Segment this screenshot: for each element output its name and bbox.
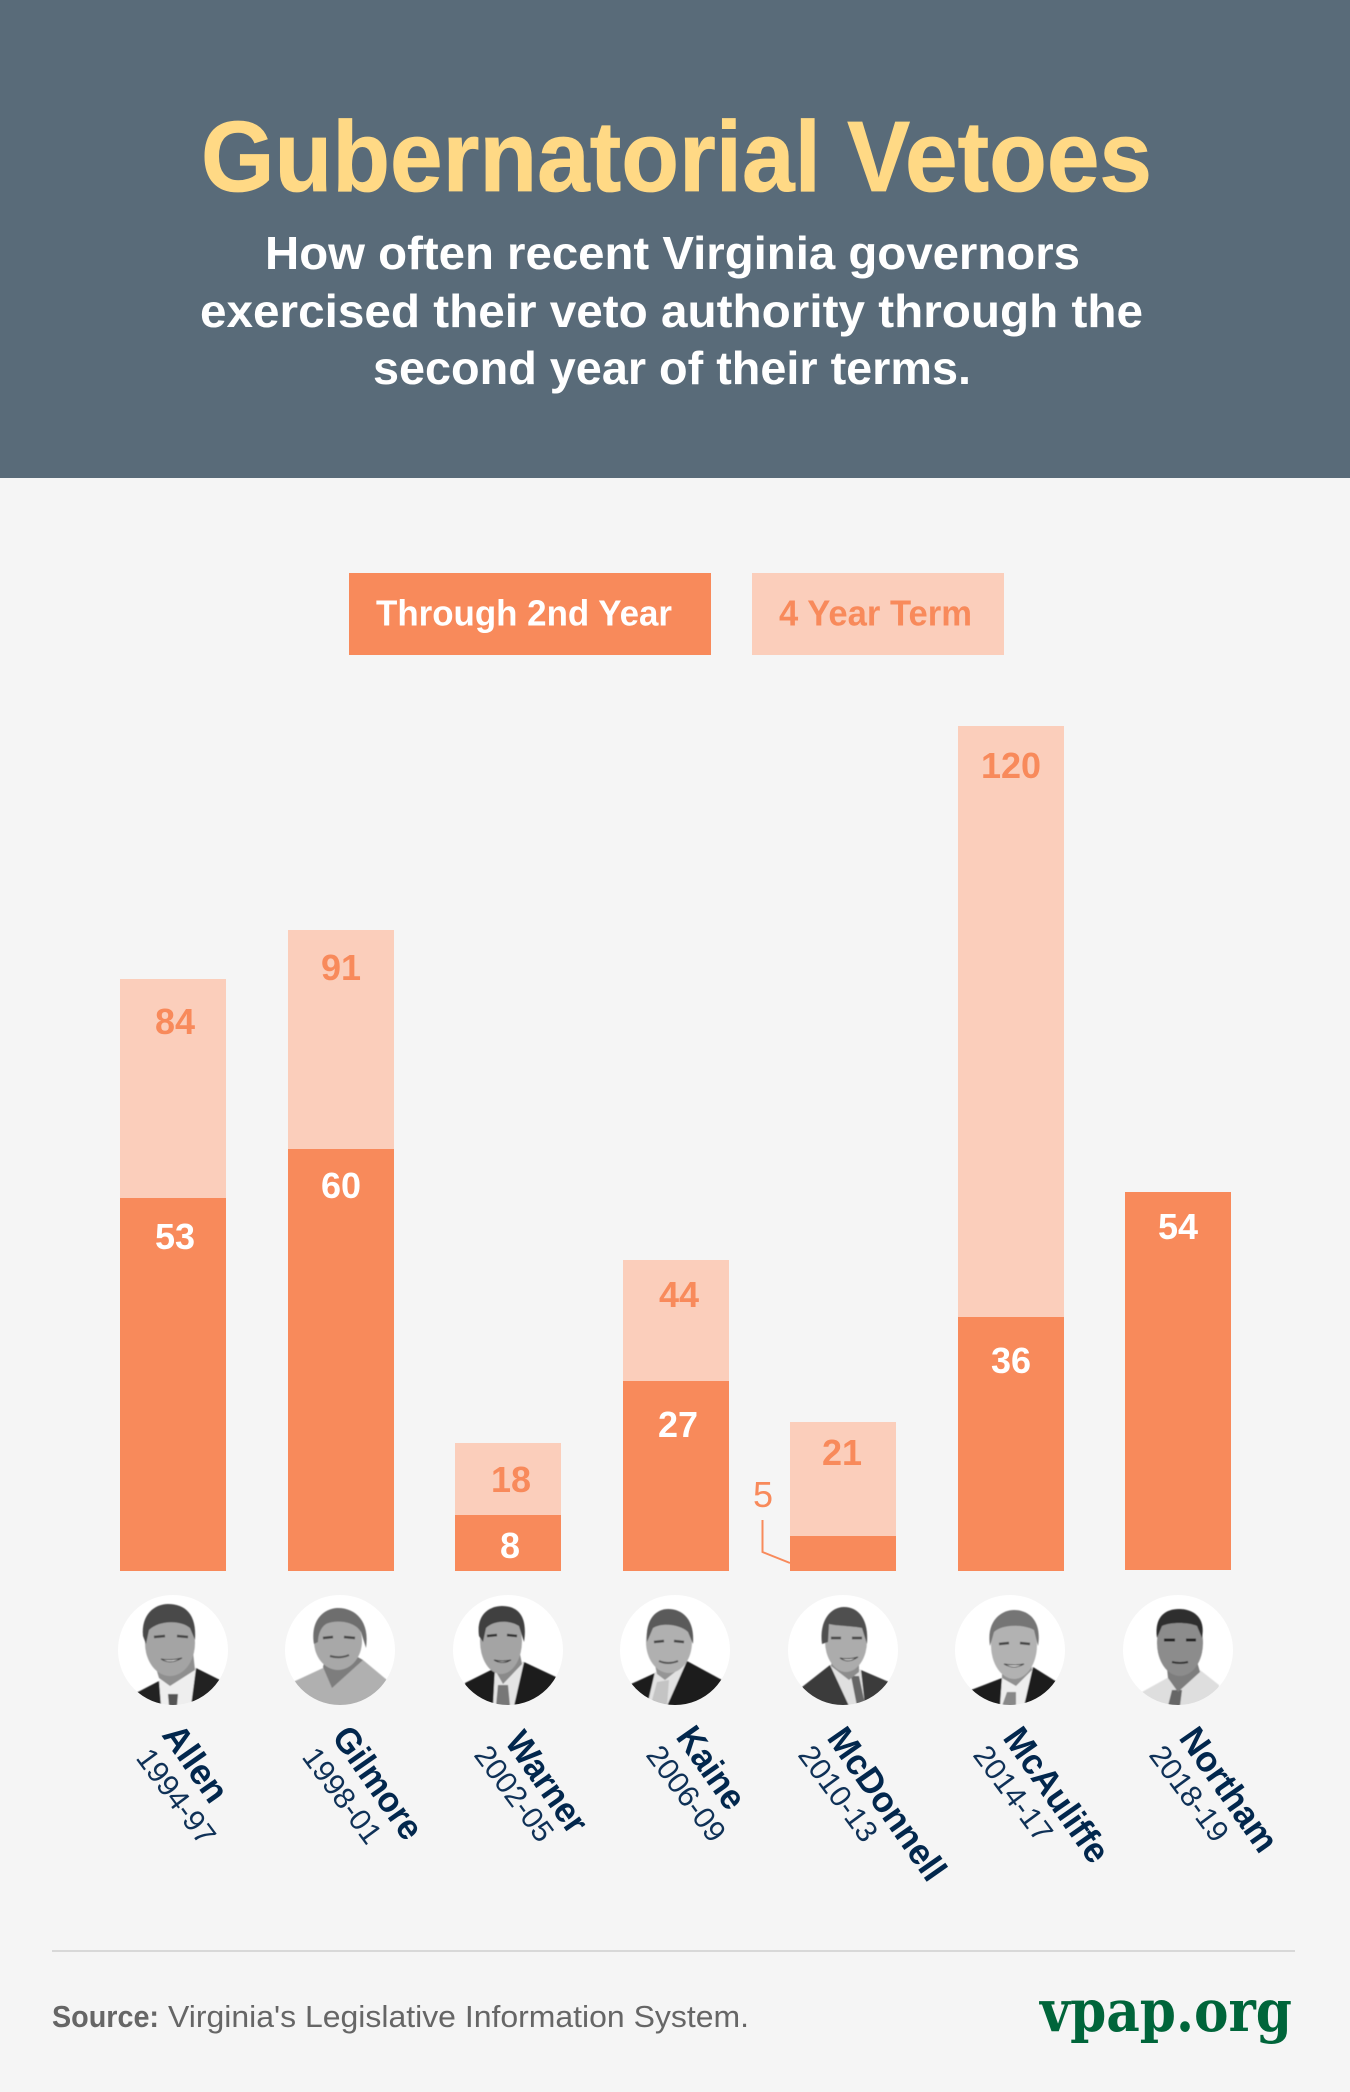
bar: Northam (1125, 1192, 1231, 1570)
bar: Gilmore: 91 (321, 947, 361, 988)
bar: Kaine: 27 (658, 1404, 698, 1445)
title: Gubernatorial Vetoes (201, 101, 1152, 213)
label: Warner: 2002-05 (467, 1740, 560, 1848)
label: McAuliffe: 2014-17 (966, 1740, 1059, 1848)
header panel (0, 0, 1350, 478)
bar: McAuliffe: 36 (991, 1340, 1031, 1381)
bar: Allen (120, 979, 226, 1571)
bar: McAuliffe: 120 (981, 745, 1041, 786)
label: Gilmore: 1998-01 (295, 1742, 388, 1850)
portrait: Northam (1123, 1595, 1233, 1710)
label: Northam: 2018-19 (1142, 1740, 1235, 1848)
label: Northam: Northam (1171, 1719, 1287, 1860)
callout: value 5 with leader line: 5 (753, 1474, 773, 1515)
label: McDonnell: McDonnell (819, 1719, 955, 1888)
label: Allen: 1994-97 (129, 1743, 222, 1851)
label: Warner: Warner (497, 1723, 597, 1841)
bar: Northam: 54 (1158, 1206, 1198, 1247)
portrait: Gilmore (285, 1595, 395, 1710)
bar: Kaine (623, 1260, 729, 1571)
bar: Warner: 18 (491, 1459, 531, 1500)
portrait: Warner (453, 1595, 563, 1710)
bar: McDonnell (753, 1422, 896, 1571)
portrait: McDonnell (788, 1595, 898, 1710)
portrait: Allen (118, 1595, 228, 1710)
subtitle: second year of their terms. (373, 342, 971, 394)
legend: through 2nd year: Through 2nd Year (376, 592, 672, 634)
label: Gilmore: Gilmore (324, 1718, 432, 1847)
logo: vpap.org: vpap.org (1038, 1977, 1292, 2045)
subtitle: exercised their veto authority through the (200, 285, 1143, 337)
portrait: Kaine (620, 1595, 730, 1710)
label: McDonnell: 2010-13 (791, 1740, 884, 1848)
label: Kaine: 2006-09 (639, 1740, 732, 1848)
bar: Kaine: 44 (659, 1274, 699, 1315)
portrait: McAuliffe (955, 1595, 1065, 1710)
label: Allen: Allen (154, 1716, 237, 1810)
subtitle (200, 227, 1143, 394)
legend: 4 year term (752, 573, 1004, 655)
bar: Gilmore: 60 (321, 1165, 361, 1206)
legend (349, 573, 1004, 655)
label: Kaine (639, 1718, 755, 1848)
bar: McDonnell: 21 (822, 1432, 862, 1473)
legend: 4 year term: 4 Year Term (779, 592, 972, 634)
source note: Source: (52, 1999, 159, 2034)
label: McAuliffe: McAuliffe (995, 1719, 1119, 1870)
subtitle: How often recent Virginia governors (265, 227, 1080, 279)
legend: through 2nd year (349, 573, 711, 655)
bar: Allen: 84 (155, 1001, 195, 1042)
label: Kaine: Kaine (668, 1718, 755, 1817)
bar: Gilmore (288, 930, 394, 1571)
bar chart (120, 726, 1231, 1571)
bar: Warner (455, 1443, 561, 1571)
bar: Allen: 53 (155, 1216, 195, 1257)
callout: value 5 with leader line (753, 1474, 790, 1563)
source note: Virginia's Legislative Information System. (168, 1999, 749, 2034)
bar: Warner: 8 (500, 1525, 520, 1566)
bar: McAuliffe (958, 726, 1064, 1571)
label: Allen (129, 1716, 237, 1851)
